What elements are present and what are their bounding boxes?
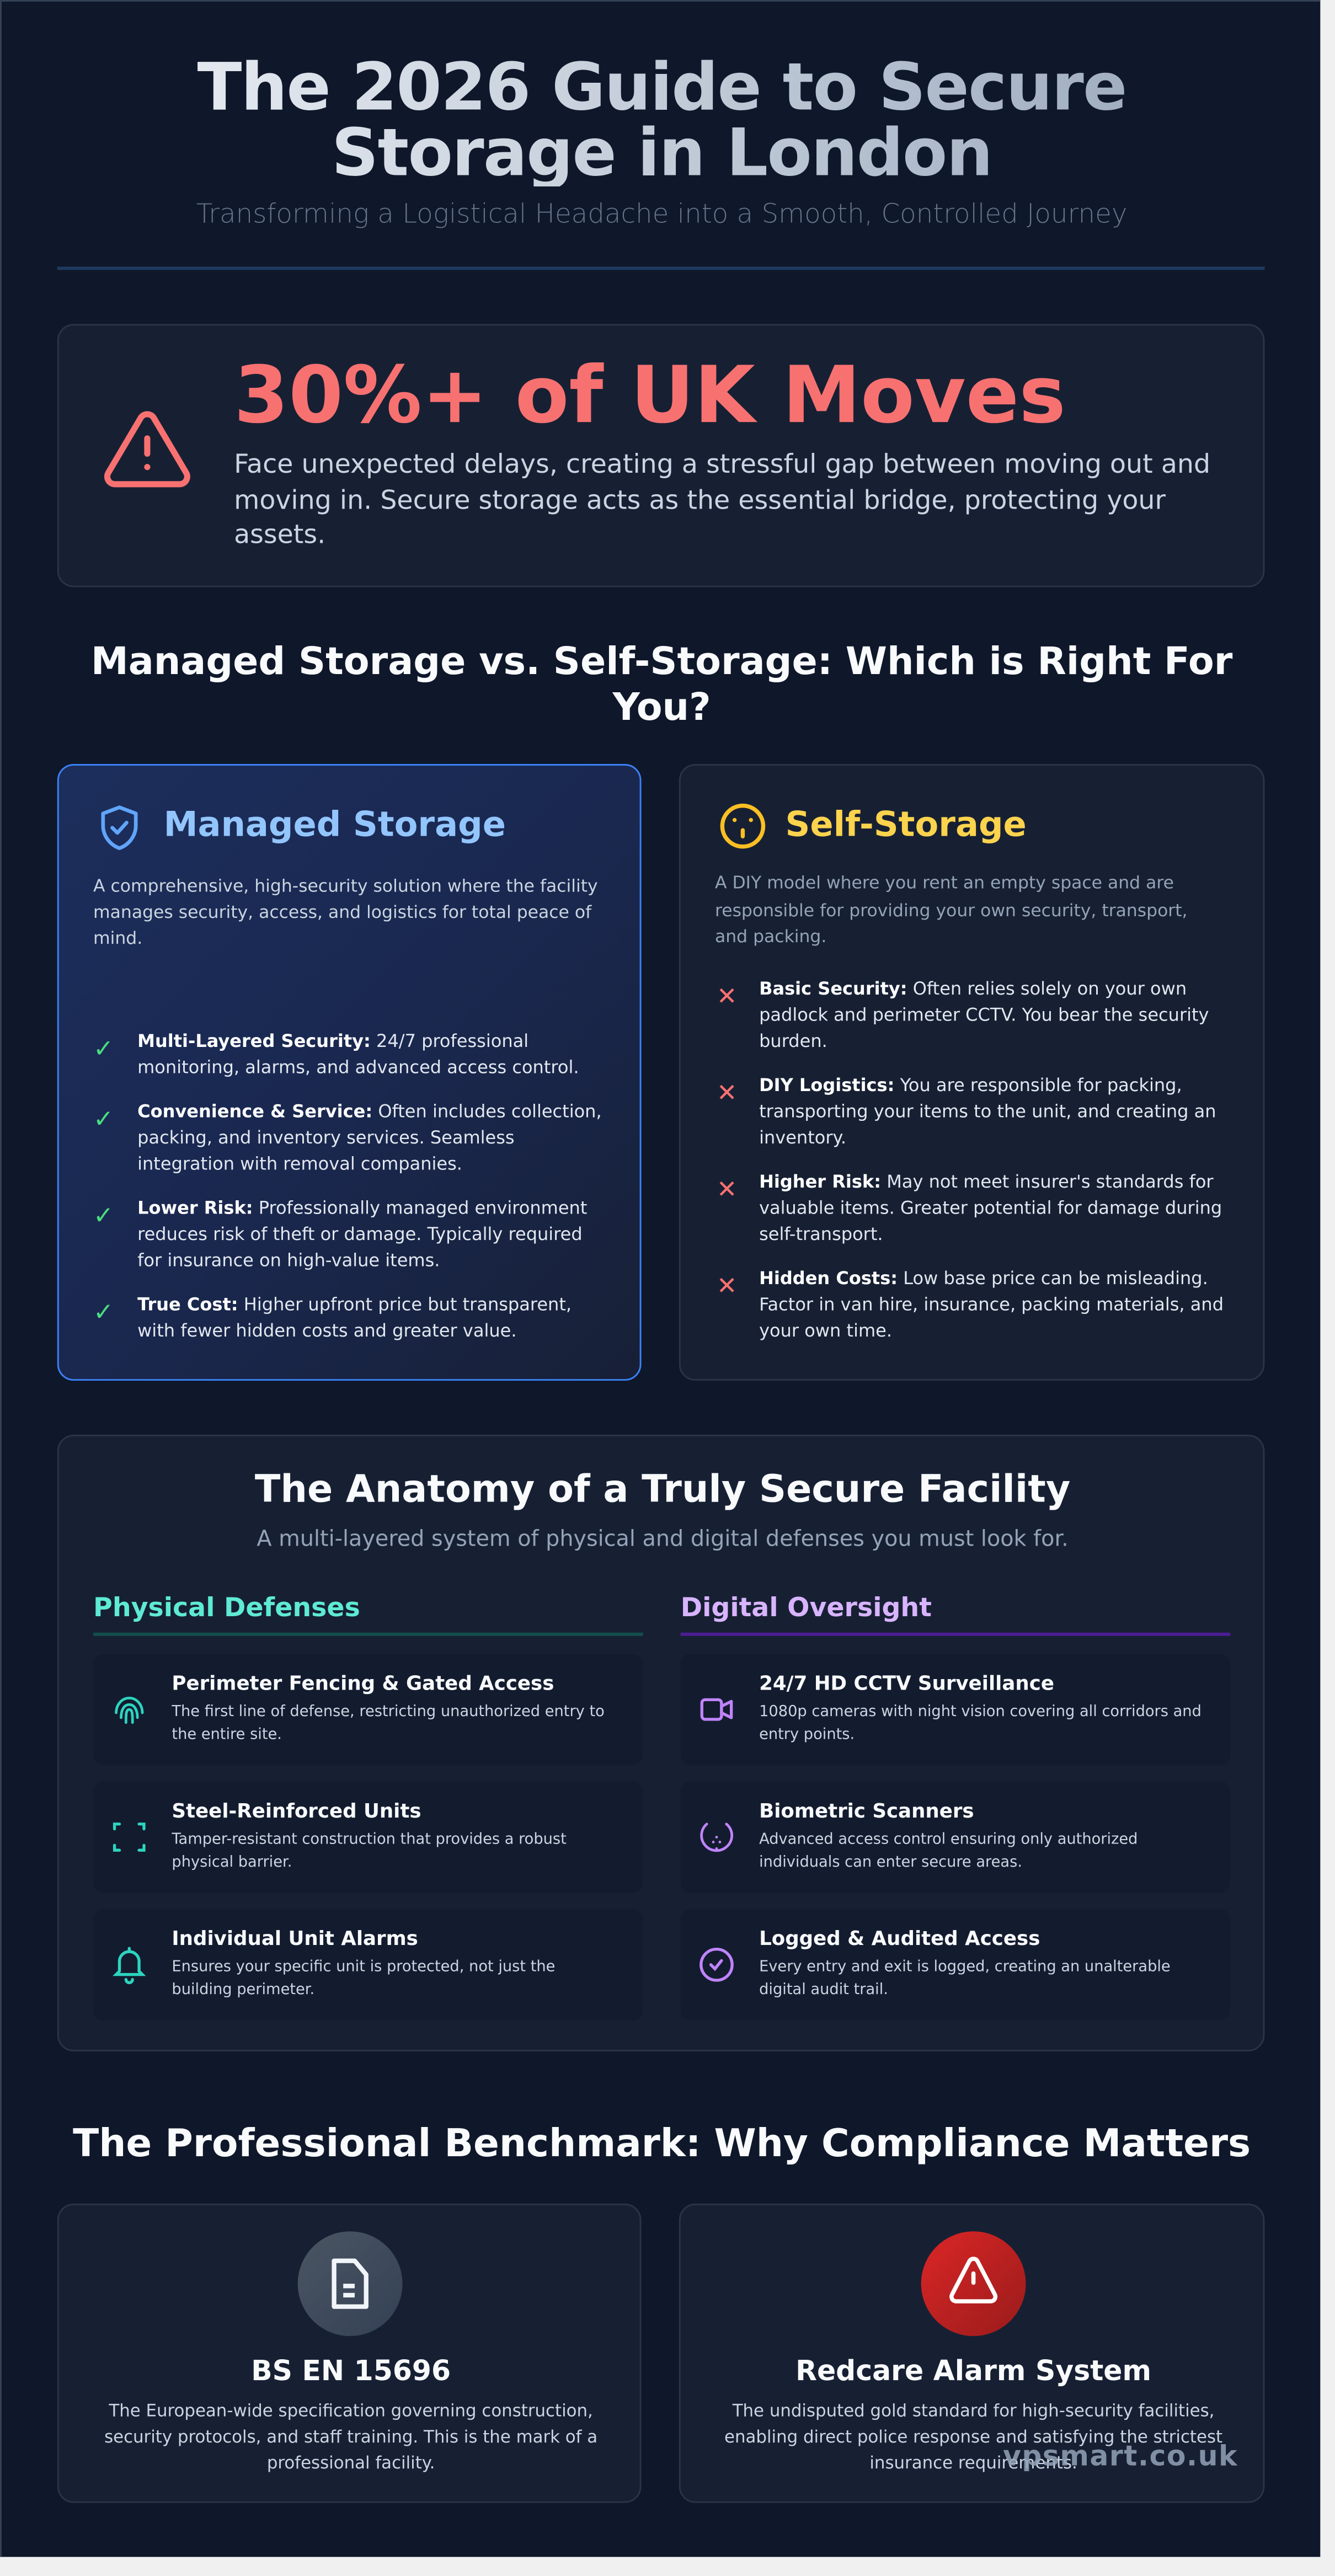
column: physical defenses xyxy=(93,1592,643,1999)
icon: document xyxy=(298,2231,403,2336)
icon: self storage xyxy=(720,803,766,848)
heading: benchmark: The Professional Benchmark: Why Compliance Matters xyxy=(73,2122,1251,2166)
heading: comparison: Managed Storage vs. Self-Storage: Which is Right For You? xyxy=(91,642,1232,730)
description: The undisputed gold standard for high-security facilities, enabling direct police response and satisfying the strictest insurance requirements. xyxy=(724,2402,1222,2473)
title: Managed Storage xyxy=(164,805,506,844)
column: physical defenses: Physical Defenses xyxy=(93,1592,360,1623)
column: digital oversight: Digital Oversight xyxy=(681,1592,932,1623)
item: unit alarms xyxy=(93,1909,643,2021)
item: logged access: Logged & Audited Access xyxy=(759,1927,1040,1950)
list: drawbacks: ✕ xyxy=(717,1078,737,1108)
list: benefits: ✓ xyxy=(93,1034,114,1063)
subtitle: Transforming a Logistical Headache into a Smooth, Controlled Journey xyxy=(196,198,1127,229)
item: biometric: Advanced access control ensuring only authorized individuals can enter secure areas. xyxy=(759,1831,1138,1872)
stat text: Face unexpected delays, creating a stressful gap between moving out and moving in. Secure storage acts as the essential bridge, protecting your assets. xyxy=(234,448,1210,549)
list: benefits xyxy=(93,1030,602,1342)
item: unit alarms: Ensures your specific unit is protected, not just the building perimeter. xyxy=(172,1958,555,1999)
item: biometric xyxy=(681,1782,1230,1893)
item: cctv xyxy=(681,1654,1230,1765)
list: benefits: True Cost: Higher upfront price but transparent, with fewer hidden costs and greater value. xyxy=(137,1294,572,1342)
description: A comprehensive, high-security solution where the facility manages security, access, and logistics for total peace of mind. xyxy=(93,877,598,949)
panel: self-storage xyxy=(679,764,1264,1381)
item: perimeter: The first line of defense, restricting unauthorized entry to the entire site. xyxy=(172,1703,605,1744)
item: perimeter xyxy=(93,1654,643,1765)
list: drawbacks: Higher Risk: May not meet insurer's standards for valuable items. Greater potential for damage during self-transport. xyxy=(759,1171,1222,1245)
subheading: A multi-layered system of physical and digital defenses you must look for. xyxy=(257,1528,1069,1552)
list: benefits: ✓ xyxy=(93,1201,114,1230)
panel: managed storage xyxy=(57,764,642,1381)
icon: alarm xyxy=(921,2231,1026,2336)
list: drawbacks: Basic Security: Often relies solely on your own padlock and perimeter CCTV. You bear the security burden. xyxy=(759,978,1209,1052)
list: benefits: ✓ xyxy=(93,1104,114,1134)
panel: Redcare xyxy=(679,2204,1264,2503)
title: The 2026 Guide to Secure xyxy=(197,51,1126,126)
description: A DIY model where you rent an empty space and are responsible for providing your own security, transport, and packing. xyxy=(715,874,1188,947)
column: digital oversight xyxy=(681,1592,1230,1999)
list: benefits: Convenience & Service: Often includes collection, packing, and inventory services. Seamless integration with removal companies. xyxy=(137,1101,602,1174)
list: drawbacks: ✕ xyxy=(717,1174,737,1204)
item: steel units: Steel-Reinforced Units xyxy=(172,1799,421,1823)
watermark: vpsmart.co.uk xyxy=(1003,2441,1238,2473)
list: drawbacks: ✕ xyxy=(717,981,737,1011)
description: The European-wide specification governing construction, security protocols, and staff training. This is the mark of a professional facility. xyxy=(104,2402,597,2473)
list: drawbacks xyxy=(717,978,1224,1342)
item: logged access: Every entry and exit is logged, creating an unalterable digital audit trail. xyxy=(759,1958,1171,1999)
item: cctv: 24/7 HD CCTV Surveillance xyxy=(759,1672,1054,1695)
panel: BS EN 15696 xyxy=(57,2204,642,2503)
stat headline: 30%+ of UK Moves xyxy=(234,350,1066,442)
item: unit alarms: Individual Unit Alarms xyxy=(172,1927,418,1950)
item: perimeter: Perimeter Fencing & Gated Access xyxy=(172,1672,554,1695)
title: Redcare Alarm System xyxy=(795,2356,1151,2388)
title: Self-Storage xyxy=(786,805,1027,844)
icon: shield xyxy=(102,805,138,850)
icon: warning triangle xyxy=(104,411,190,488)
item: cctv: 1080p cameras with night vision covering all corridors and entry points. xyxy=(759,1703,1202,1744)
heading: The Anatomy of a Truly Secure Facility xyxy=(255,1469,1070,1511)
list: drawbacks: ✕ xyxy=(717,1271,737,1301)
list: benefits: Lower Risk: Professionally managed environment reduces risk of theft or damage. Typically required for insurance on high-value items. xyxy=(137,1198,587,1271)
item: steel units: Tamper-resistant construction that provides a robust physical barrier. xyxy=(172,1831,567,1872)
list: benefits: ✓ xyxy=(93,1297,114,1327)
item: steel units xyxy=(93,1782,643,1893)
title: Storage in London xyxy=(332,116,992,191)
list: drawbacks: Hidden Costs: Low base price can be misleading. Factor in van hire, insurance, packing materials, and your own time. xyxy=(759,1268,1224,1342)
item: biometric: Biometric Scanners xyxy=(759,1799,974,1823)
list: benefits: Multi-Layered Security: 24/7 professional monitoring, alarms, and advanced access control. xyxy=(137,1030,579,1078)
list: drawbacks: DIY Logistics: You are responsible for packing, transporting your items to the unit, and creating an inventory. xyxy=(759,1075,1216,1148)
item: logged access xyxy=(681,1909,1230,2021)
panel: anatomy xyxy=(57,1435,1264,2051)
title: BS EN 15696 xyxy=(251,2356,451,2388)
panel: alert stat xyxy=(57,324,1264,587)
title xyxy=(2,56,1322,186)
